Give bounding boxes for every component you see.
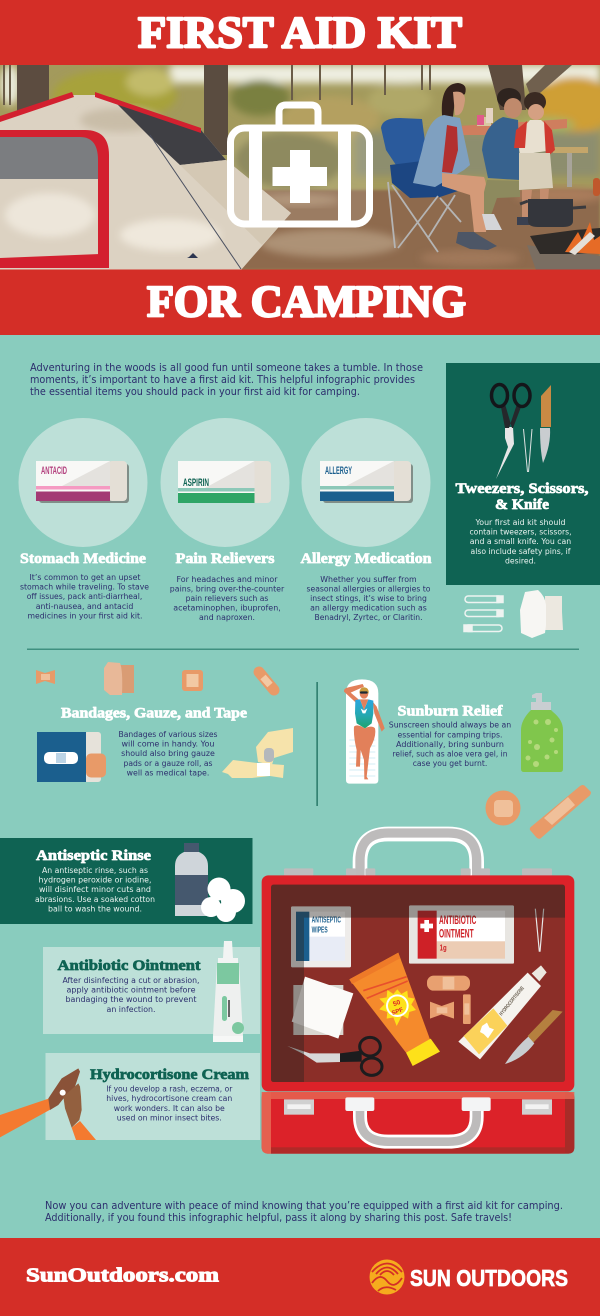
body text — [389, 720, 511, 768]
logo: sun outdoors — [370, 1260, 568, 1294]
tree trunks — [17, 65, 49, 115]
body text: pains, bring over-the-counter — [170, 583, 285, 593]
closing text — [45, 1200, 563, 1224]
icon: hands applying cream — [0, 1068, 96, 1140]
body text: After disinfecting a cut or abrasion, — [62, 975, 200, 985]
sunscreen tube — [349, 953, 440, 1066]
body text: acetaminophen, ibuprofen, — [173, 603, 281, 613]
body text: work wonders. It can also be — [114, 1103, 225, 1113]
heading: Allergy Medication — [300, 551, 432, 567]
icon: tweezers — [524, 429, 532, 472]
antibiotic ointment packet: 1g — [440, 944, 447, 953]
body text: abrasions. Use a soaked cotton — [35, 894, 155, 904]
panel: sunburn relief — [344, 679, 563, 784]
child — [514, 92, 555, 225]
base latches — [284, 1099, 314, 1115]
gauze pads — [292, 977, 353, 1039]
heading: & Knife — [495, 497, 550, 513]
icon: square plaster — [182, 670, 203, 691]
body text — [106, 1084, 233, 1122]
camp chair — [381, 118, 470, 252]
lid shadow — [271, 885, 565, 1082]
body text — [20, 572, 149, 620]
icon: antacid box: ANTACID — [41, 465, 67, 477]
thin distant trunks — [4, 65, 430, 105]
body text: seasonal allergies or allergies to — [306, 583, 431, 593]
closing text: Additionally, if you found this infographic helpful, pass it along by sharing this post. Safe travels! — [45, 1212, 512, 1224]
body text: apply antibiotic ointment before — [66, 985, 196, 995]
icon: white first aid kit outline — [230, 105, 370, 224]
heading: Hydrocortisone Cream — [90, 1067, 250, 1083]
woman — [413, 83, 497, 250]
icon: gauze roll — [520, 590, 563, 638]
icon: bandage roll — [104, 662, 134, 695]
body text: an infection. — [106, 1004, 156, 1014]
antiseptic wipes packet: WIPES — [312, 924, 328, 934]
heading: Stomach Medicine — [20, 551, 147, 567]
base handle — [360, 1108, 477, 1142]
panel: tweezers, scissors and knife — [446, 363, 600, 585]
panel: antibiotic ointment — [43, 941, 260, 1042]
logo: sun outdoors: SUN OUTDOORS — [410, 1265, 568, 1291]
body text: Bandages of various sizes — [118, 729, 218, 739]
antibiotic ointment packet: OINTMENT — [439, 927, 474, 941]
body text — [306, 574, 431, 622]
header band: first aid kit — [0, 0, 600, 65]
fire pit and flame — [527, 222, 600, 270]
body text: relief, such as aloe vera gel, in — [392, 748, 508, 758]
body text — [170, 574, 285, 622]
body text — [35, 865, 155, 913]
body text: ball to wash the wound. — [48, 903, 142, 913]
heading: Pain Relievers — [176, 551, 275, 567]
title line one: FIRST AID KIT — [138, 8, 462, 57]
intro text — [30, 362, 423, 398]
ground — [235, 190, 600, 270]
kit hinges — [284, 868, 552, 876]
body text: well as medical tape. — [127, 767, 209, 777]
cooking pot — [520, 178, 600, 227]
hydrocortisone tube — [458, 965, 547, 1059]
icon: ointment tube — [213, 941, 244, 1042]
body text: pain relievers such as — [186, 593, 268, 603]
body text: and a small knife. You can — [470, 536, 571, 546]
small bandages — [427, 976, 471, 1024]
panel: hydrocortisone cream — [0, 1053, 260, 1140]
icon: allergy box: ALLERGY — [325, 465, 352, 477]
icon: round plaster — [486, 790, 520, 826]
closing text: Now you can adventure with peace of mind knowing that you’re equipped with a first aid kit for camping. — [45, 1200, 563, 1212]
kit base — [262, 1092, 574, 1154]
background foliage — [0, 65, 600, 188]
antiseptic wipes packet: ANTISEPTIC — [312, 915, 341, 925]
body text — [62, 975, 200, 1014]
panel: pain relievers — [160, 418, 290, 622]
icon: aspirin box: ASPIRIN — [183, 477, 209, 489]
panel: bandages, gauze, and tape — [36, 662, 293, 782]
body text: bandaging the wound to prevent — [66, 994, 196, 1004]
panel: stomach medicine — [18, 418, 149, 620]
body text: desired. — [505, 555, 536, 565]
body text: and naproxen. — [199, 612, 255, 622]
icon: strip bandage — [259, 672, 274, 690]
icon: allergy box — [320, 461, 413, 503]
heading: Tweezers, Scissors, — [456, 481, 589, 497]
body text: pads or a gauze roll, as — [124, 758, 212, 768]
body text: Whether you suffer from — [320, 574, 417, 584]
icon: scissors — [492, 384, 530, 479]
footer of header: for camping band — [0, 270, 600, 335]
divider — [27, 648, 579, 650]
icon: large strip bandage — [530, 785, 591, 839]
body text: Sunscreen should always be an — [389, 720, 511, 730]
icon: safety pins — [464, 596, 503, 632]
body text: hydrogen peroxide or iodine, — [38, 875, 152, 885]
body text: will come in handy. You — [122, 739, 214, 749]
body text: case you get burnt. — [413, 758, 487, 768]
sunscreen tube: SPF — [391, 1007, 404, 1017]
body text: off issues, pack anti-diarrheal, — [27, 591, 142, 601]
kit lid — [262, 875, 574, 1091]
icon: bandage box — [37, 732, 106, 782]
man — [482, 88, 522, 230]
heading: Antibiotic Ointment — [58, 958, 200, 974]
picnic tables — [459, 108, 588, 187]
body text: anti-nausea, and antacid — [36, 601, 133, 611]
heading: Antiseptic Rinse — [36, 848, 151, 864]
tent — [0, 92, 291, 270]
footer — [0, 1238, 600, 1316]
body text: an allergy medication such as — [310, 603, 427, 613]
heading — [456, 481, 589, 513]
body text: Additionally, bring sunburn — [396, 739, 504, 749]
intro text: moments, it’s important to have a first aid kit. This helpful infographic provides — [30, 374, 415, 386]
body text — [118, 729, 218, 777]
small knife — [505, 1010, 563, 1064]
body text: For headaches and minor — [176, 574, 278, 584]
title line two: FOR CAMPING — [147, 277, 466, 326]
kit top handle — [360, 833, 477, 877]
icon: aloe vera gel bottle — [521, 693, 563, 772]
tweezers — [535, 909, 544, 952]
antiseptic wipes packet — [291, 906, 351, 967]
body text: medicines in your first aid kit. — [28, 610, 142, 620]
icon: antiseptic bottle — [175, 843, 208, 916]
intro text: Adventuring in the woods is all good fun until someone takes a tumble. In those — [30, 362, 423, 374]
heading: Sunburn Relief — [398, 704, 503, 720]
body text: insect stings, it’s wise to bring — [310, 593, 427, 603]
icon: antacid box — [36, 461, 129, 503]
body text: used on minor insect bites. — [117, 1112, 222, 1122]
illustration: open red first aid kit — [262, 833, 574, 1154]
icon: woman on pool float — [344, 679, 385, 784]
body text: stomach while traveling. To stave — [20, 582, 149, 592]
heading: Bandages, Gauze, and Tape — [61, 706, 247, 722]
icon: aspirin box — [178, 461, 271, 503]
panel: antiseptic rinse — [0, 838, 252, 924]
body text: essential for camping trips. — [398, 729, 502, 739]
sunscreen tube: 50 — [392, 999, 402, 1008]
icon: hands wrapping gauze — [222, 728, 293, 778]
panel: allergy medication — [300, 418, 432, 622]
icon: butterfly bandage — [36, 670, 55, 684]
antibiotic ointment packet — [409, 905, 514, 964]
body text — [470, 517, 572, 565]
body text: If you develop a rash, eczema, or — [106, 1084, 233, 1094]
body text: should also bring gauze — [121, 748, 215, 758]
body text: It’s common to get an upset — [30, 572, 140, 582]
vertical divider — [316, 682, 318, 806]
body text: contain tweezers, scissors, — [470, 527, 572, 537]
body text: Your first aid kit should — [475, 517, 566, 527]
icon: knife — [540, 385, 551, 463]
body text: will disinfect minor cuts and — [39, 884, 151, 894]
body text: An antiseptic rinse, such as — [42, 865, 148, 875]
body text: Benadryl, Zyrtec, or Claritin. — [314, 612, 422, 622]
antibiotic ointment packet: ANTIBIOTIC — [439, 913, 477, 927]
body text: hives, hydrocortisone cream can — [106, 1093, 232, 1103]
hydrocortisone tube: HYDROCORTISONE — [499, 985, 526, 1017]
website url: SunOutdoors.com — [26, 1265, 219, 1287]
body text: also include safety pins, if — [470, 546, 571, 556]
hero photo: family camping by a tent — [0, 65, 600, 270]
icon: cotton balls — [201, 878, 245, 922]
intro text: the essential items you should pack in your first aid kit for camping. — [30, 386, 360, 398]
scissors — [287, 1037, 382, 1075]
